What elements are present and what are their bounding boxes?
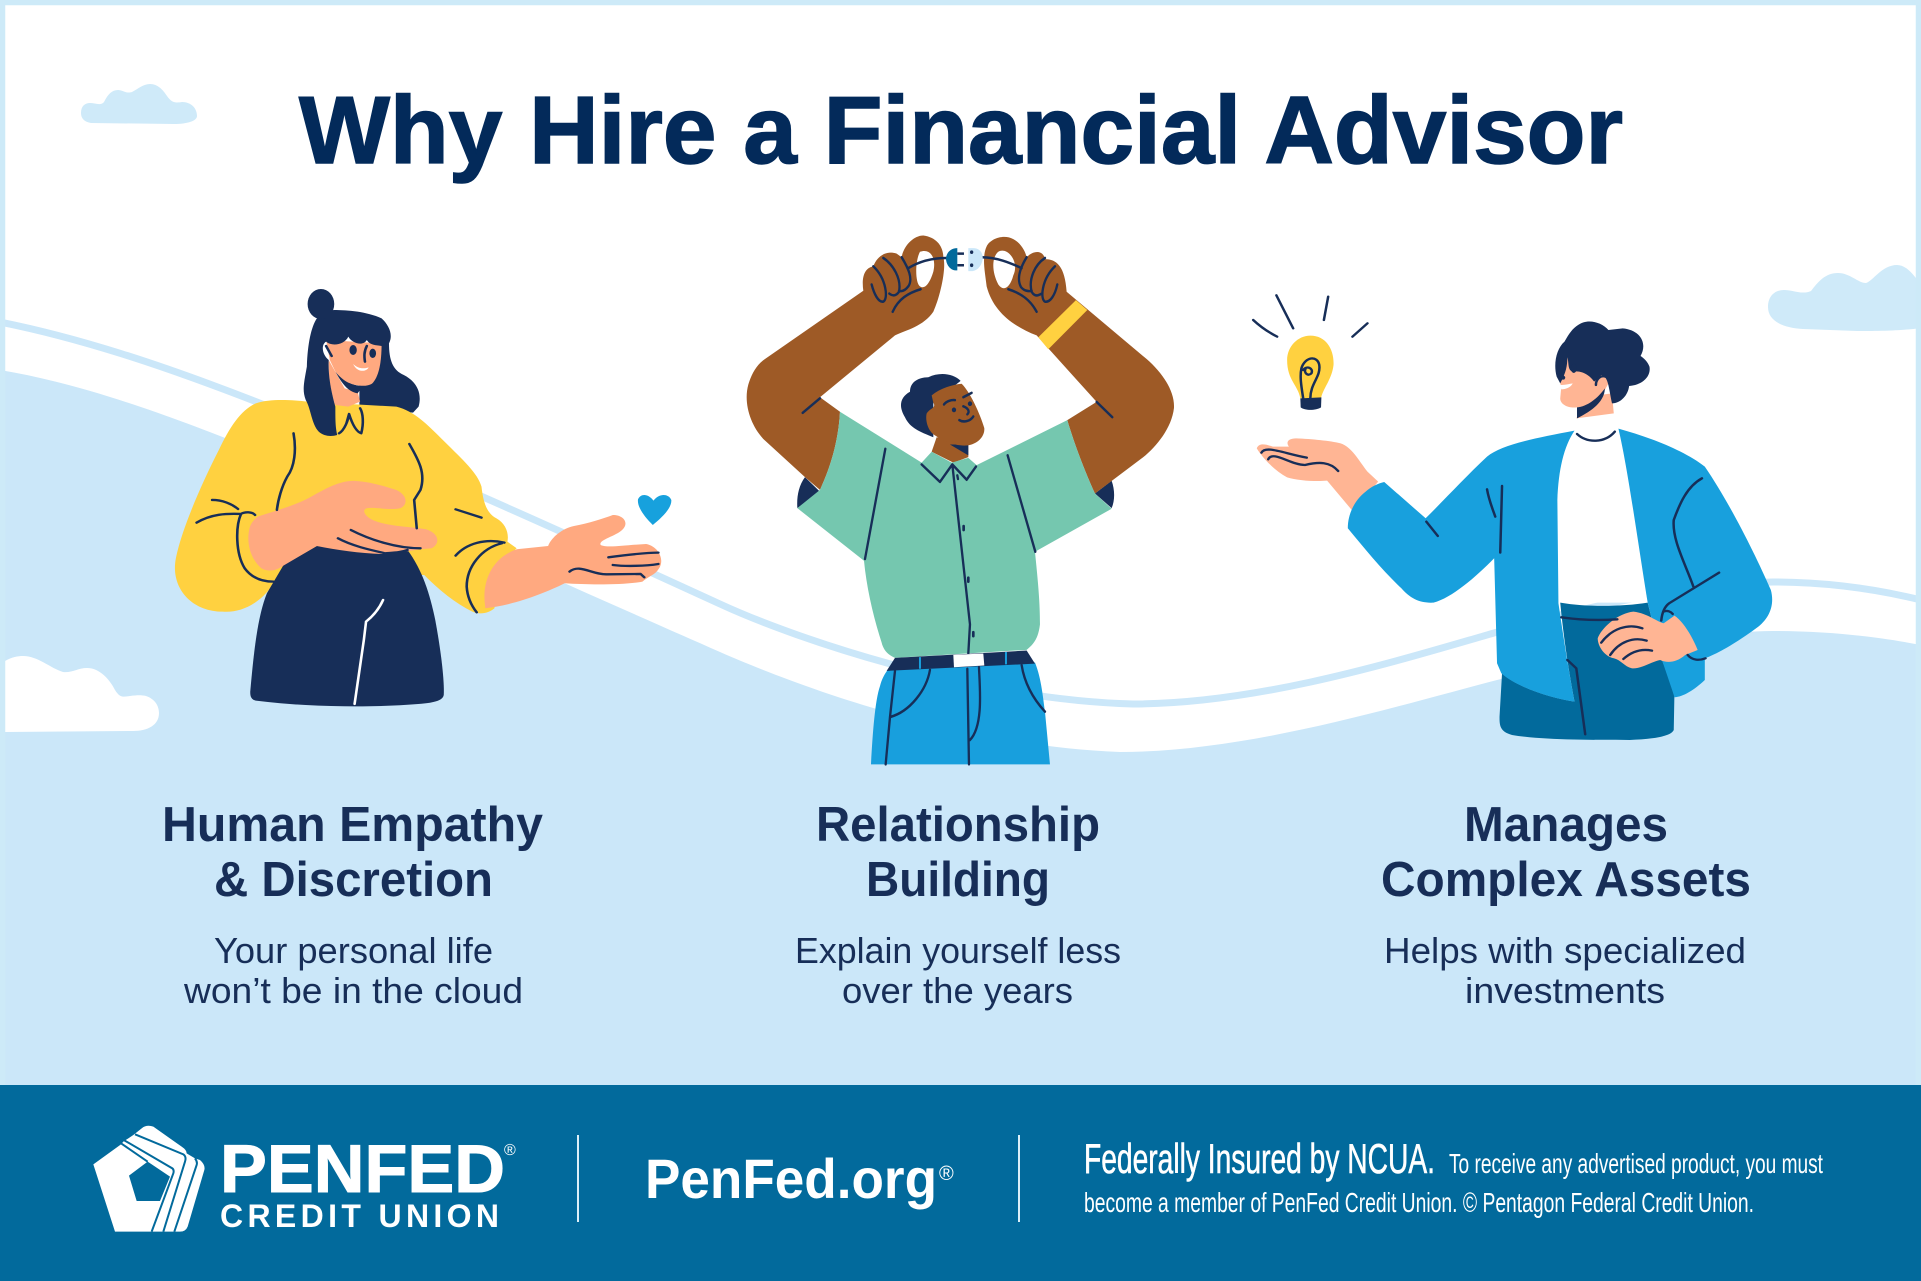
illustration: man with light bulb [1253, 295, 1772, 740]
hair [901, 374, 961, 437]
title: Why Hire a Financial Advisor [299, 77, 1623, 184]
heading: Manages [1464, 798, 1668, 852]
white undershirt [1557, 414, 1648, 603]
PenFed logo mark [93, 1126, 205, 1232]
description: won’t be in the cloud [183, 970, 523, 1011]
left arm and hand [747, 235, 944, 490]
heading: Human Empathy [162, 798, 543, 852]
front hair [304, 310, 391, 436]
cloud: top right [1768, 265, 1921, 331]
description: over the years [842, 970, 1073, 1011]
icon: plug [946, 248, 964, 270]
clothing and hand lines [1426, 432, 1719, 734]
right arm and hand [984, 237, 1174, 494]
neck and chin shadow [329, 360, 360, 407]
left arm [248, 481, 437, 571]
face [1559, 357, 1610, 407]
icon: light bulb [1253, 295, 1367, 410]
neck [932, 437, 968, 463]
jacket left side [1348, 431, 1575, 702]
heading: Building [866, 853, 1050, 907]
heading: Relationship [816, 798, 1100, 852]
heading: & Discretion [214, 853, 493, 907]
icon: heart [638, 495, 671, 525]
back hair [359, 343, 420, 413]
description [183, 930, 523, 1011]
face [926, 384, 984, 446]
hand on hip [1598, 612, 1698, 668]
raised hand [1257, 438, 1378, 512]
divider [577, 1135, 579, 1222]
trousers [1500, 603, 1674, 740]
description: investments [1465, 970, 1665, 1011]
jacket right side [1618, 429, 1772, 697]
heading: Complex Assets [1381, 853, 1751, 907]
PenFed wordmark: PENFED [220, 1131, 505, 1207]
website: ® [939, 1163, 954, 1185]
right arm [484, 515, 661, 608]
column: manages complex assets [1381, 798, 1751, 1011]
description: Explain yourself less [795, 930, 1121, 971]
chin shadow [1577, 388, 1605, 418]
facial features [944, 393, 973, 421]
eyes [349, 345, 376, 358]
PenFed wordmark: CREDIT UNION [220, 1198, 499, 1234]
PenFed wordmark [220, 1131, 516, 1234]
column: human empathy and discretion [162, 798, 543, 1011]
belt [887, 651, 1035, 671]
skirt seam [355, 600, 383, 704]
icon: socket [968, 248, 983, 271]
sweater [175, 400, 517, 613]
facial features [1560, 364, 1606, 389]
cloud: top left [81, 84, 197, 124]
description [1384, 930, 1746, 1011]
neck [1576, 393, 1614, 418]
footer band [0, 1085, 1921, 1281]
clothing and hand lines [197, 346, 658, 612]
smile [353, 364, 369, 371]
heading [162, 798, 543, 907]
divider [1018, 1135, 1020, 1222]
illustration: man connecting plug [747, 235, 1174, 764]
description [795, 930, 1121, 1011]
shirt lines [865, 449, 1035, 653]
PenFed wordmark: ® [504, 1142, 516, 1159]
skirt [250, 546, 444, 706]
sleeve undersides [797, 477, 1114, 508]
illustration: woman with heart [175, 289, 671, 706]
jeans lines [886, 665, 1045, 764]
column: relationship building [795, 798, 1121, 1011]
heading [816, 798, 1100, 907]
legal disclaimer: Federally Insured by NCUA. [1084, 1135, 1435, 1182]
heading [1381, 798, 1751, 907]
hand lines and cord [803, 257, 1112, 417]
face [326, 340, 382, 386]
cloud: bottom left [5, 656, 159, 732]
hair bun [308, 289, 334, 319]
website: PenFed.org [645, 1147, 937, 1210]
finger gaps [916, 251, 1015, 288]
shirt [797, 412, 1112, 658]
description: Your personal life [214, 930, 493, 971]
background wave line [0, 322, 1921, 704]
legal disclaimer [1084, 1135, 1823, 1218]
background hill [0, 370, 1921, 1090]
jeans [871, 663, 1050, 764]
hair [1555, 321, 1650, 403]
bracelet [1038, 300, 1087, 349]
description: Helps with specialized [1384, 930, 1746, 971]
